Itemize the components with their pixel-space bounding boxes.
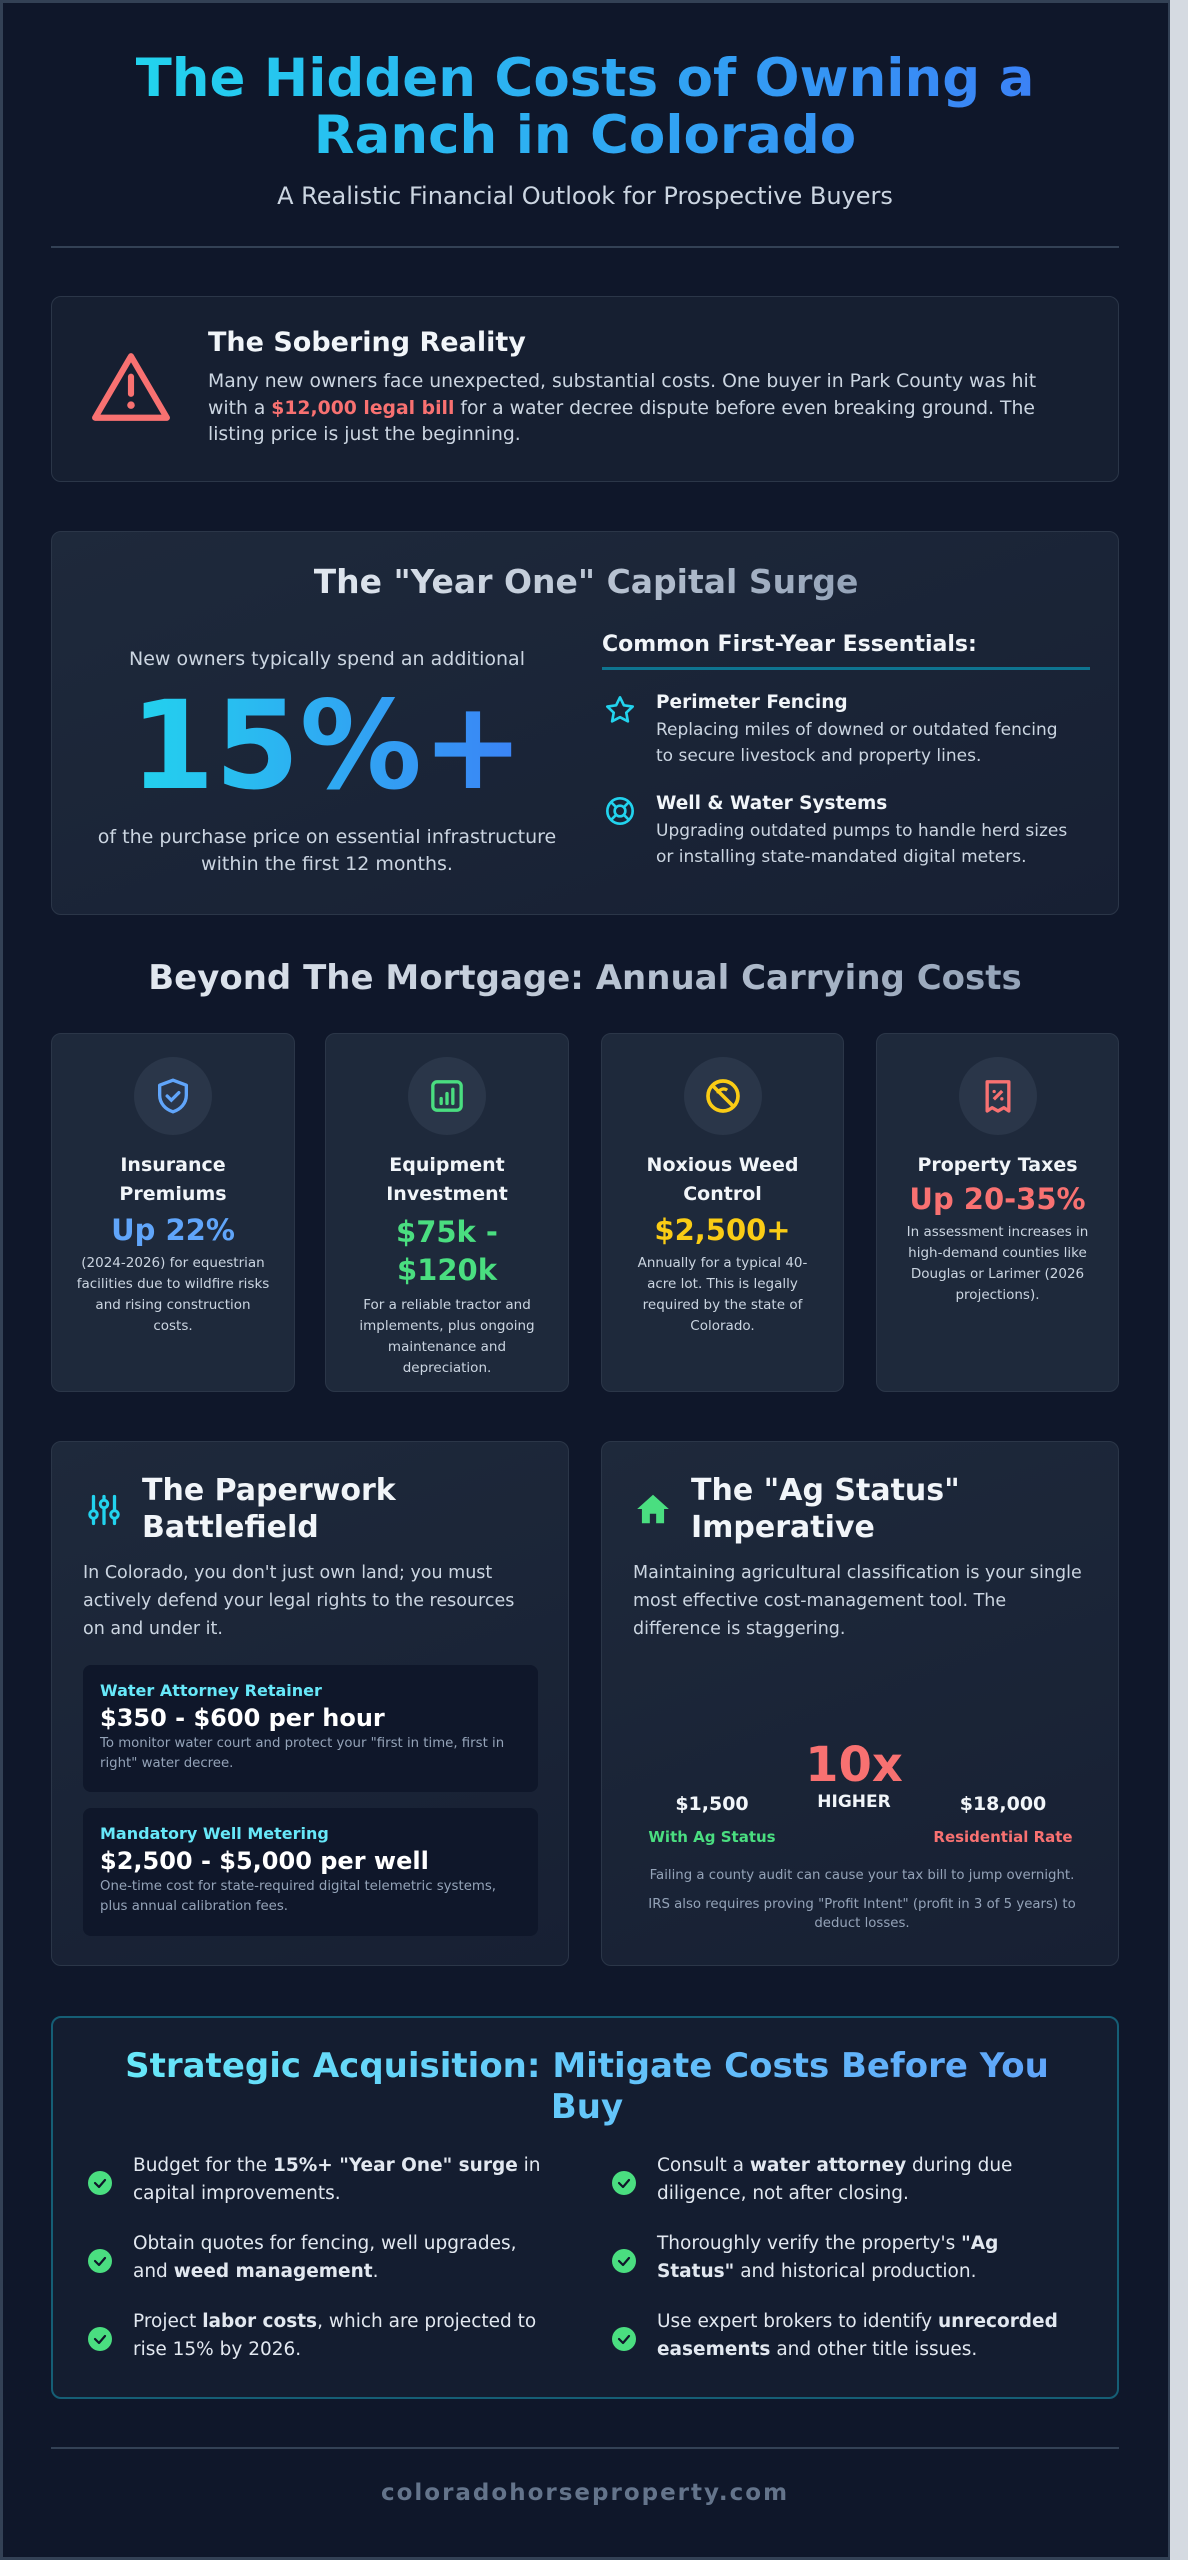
card: property taxes: Up 20-35%	[909, 1182, 1086, 1216]
cost box: water attorney: $350 - $600 per hour	[100, 1704, 385, 1732]
card: weed control	[601, 1033, 844, 1392]
heading	[125, 2046, 1049, 2127]
title	[136, 48, 1034, 166]
panel: year one capital surge	[51, 531, 1119, 915]
checklist	[88, 2155, 1058, 2360]
card: insurance	[51, 1033, 295, 1392]
footer: coloradohorseproperty.com	[381, 2480, 789, 2506]
big stat: within the first 12 months.	[201, 853, 453, 875]
cost box: well metering: One-time cost for state-required digital telemetric systems, plus annual calibration fees.	[100, 1879, 496, 1914]
item: fencing: Perimeter Fencing	[656, 692, 848, 713]
icon: sliders	[88, 1494, 120, 1526]
big stat	[98, 648, 556, 875]
icon: no sign	[684, 1057, 762, 1135]
footnotes: Failing a county audit can cause your tax bill to jump overnight.	[650, 1868, 1074, 1883]
footnotes	[648, 1868, 1076, 1931]
card: property taxes: In assessment increases in high-demand counties like Douglas or Larimer (2026 projections).	[907, 1224, 1088, 1303]
cost box: well metering	[83, 1808, 538, 1936]
card: weed control: Annually for a typical 40-acre lot. This is legally required by the state of Colorado.	[638, 1255, 807, 1334]
cost box: well metering: Mandatory Well Metering	[100, 1824, 329, 1843]
body: Maintaining agricultural classification is your single most effective cost-management tool. The difference is staggering.	[633, 1563, 1082, 1639]
heading: Imperative	[691, 1510, 875, 1545]
comparison: $18,000	[960, 1793, 1046, 1815]
panel: sobering reality	[51, 296, 1119, 482]
heading	[142, 1473, 396, 1545]
item: well: Well & Water Systems	[656, 793, 887, 814]
card: equipment: $120k	[397, 1253, 497, 1287]
card: equipment: Investment	[386, 1183, 508, 1205]
item: Consult a water attorney during due diligence, not after closing.	[657, 2155, 1012, 2204]
heading: Battlefield	[142, 1510, 319, 1545]
body: In Colorado, you don't just own land; you must actively defend your legal rights to the resources on and under it.	[83, 1563, 514, 1639]
heading: The "Ag Status"	[691, 1473, 960, 1508]
card: equipment: $75k -	[396, 1215, 498, 1249]
heading: Buy	[551, 2087, 623, 2127]
card: weed control: $2,500+	[654, 1213, 791, 1247]
card: equipment: For a reliable tractor and implements, plus ongoing maintenance and depreciation.	[359, 1297, 535, 1376]
comparison: HIGHER	[817, 1792, 891, 1812]
item: Thoroughly verify the property's "Ag Status" and historical production.	[657, 2233, 998, 2282]
panel: ag status	[601, 1441, 1119, 1966]
item: Obtain quotes for fencing, well upgrades, and weed management.	[133, 2233, 517, 2282]
footnotes: IRS also requires proving "Profit Intent" (profit in 3 of 5 years) to deduct losses.	[648, 1896, 1076, 1931]
icon: chart	[408, 1057, 486, 1135]
heading: The Sobering Reality	[208, 327, 526, 358]
heading	[691, 1473, 960, 1545]
heading: annual carrying costs: Beyond The Mortgage: Annual Carrying Costs	[148, 958, 1022, 998]
big stat: of the purchase price on essential infrastructure	[98, 826, 556, 848]
card: insurance: (2024-2026) for equestrian facilities due to wildfire risks and rising construction costs.	[77, 1255, 269, 1334]
heading: The "Year One" Capital Surge	[314, 562, 858, 601]
icon: house	[637, 1494, 669, 1524]
essentials list: Common First-Year Essentials:	[602, 632, 977, 657]
comparison	[648, 1737, 1073, 1846]
heading: The Paperwork	[142, 1473, 396, 1508]
panel: paperwork battlefield	[51, 1441, 569, 1966]
comparison: Residential Rate	[933, 1828, 1073, 1846]
icon: lifebuoy	[606, 797, 634, 825]
title: Ranch in Colorado	[314, 105, 856, 166]
icon: warning triangle	[92, 353, 170, 421]
item: fencing: Replacing miles of downed or outdated fencing to secure livestock and property lines.	[656, 720, 1058, 766]
item: Budget for the 15%+ "Year One" surge in capital improvements.	[133, 2155, 541, 2204]
item: well: Upgrading outdated pumps to handle herd sizes or installing state-mandated digital meters.	[656, 821, 1067, 867]
panel: strategic acquisition	[51, 2016, 1119, 2399]
card: equipment	[325, 1033, 569, 1392]
cost box: well metering: $2,500 - $5,000 per well	[100, 1847, 429, 1875]
item: Project labor costs, which are projected to rise 15% by 2026.	[133, 2311, 536, 2360]
icon: star	[606, 696, 634, 723]
card: property taxes: Property Taxes	[917, 1154, 1078, 1176]
cost box: water attorney	[83, 1665, 538, 1792]
body text: Many new owners face unexpected, substantial costs. One buyer in Park County was hit with a $12,000 legal bill for a water decree dispute before even breaking ground. The listing price is just the beginning.	[208, 371, 1036, 445]
big stat: New owners typically spend an additional	[129, 648, 525, 670]
title: The Hidden Costs of Owning a	[136, 48, 1034, 109]
icon: shield	[134, 1057, 212, 1135]
cost box: water attorney: Water Attorney Retainer	[100, 1681, 322, 1700]
heading: Strategic Acquisition: Mitigate Costs Before You	[125, 2046, 1049, 2086]
card: equipment: Equipment	[389, 1154, 505, 1176]
comparison: 10x	[805, 1737, 903, 1793]
card: weed control: Control	[683, 1183, 762, 1205]
card: property taxes	[876, 1033, 1119, 1392]
comparison: $1,500	[675, 1793, 749, 1815]
card: insurance: Premiums	[119, 1183, 227, 1205]
card: insurance: Insurance	[120, 1154, 226, 1176]
icons: checks	[88, 2171, 636, 2351]
item: Use expert brokers to identify unrecorded easements and other title issues.	[657, 2311, 1058, 2360]
subtitle: A Realistic Financial Outlook for Prospective Buyers	[277, 182, 893, 210]
cost box: water attorney: To monitor water court and protect your "first in time, first in right" water decree.	[100, 1736, 504, 1771]
item: well	[606, 793, 1067, 867]
card: insurance: Up 22%	[111, 1213, 235, 1247]
comparison: With Ag Status	[648, 1828, 776, 1846]
item: fencing	[606, 692, 1058, 766]
icon: receipt	[958, 1057, 1036, 1135]
big stat: 15%+	[130, 675, 524, 817]
card: weed control: Noxious Weed	[647, 1154, 798, 1176]
essentials list	[602, 632, 1090, 867]
